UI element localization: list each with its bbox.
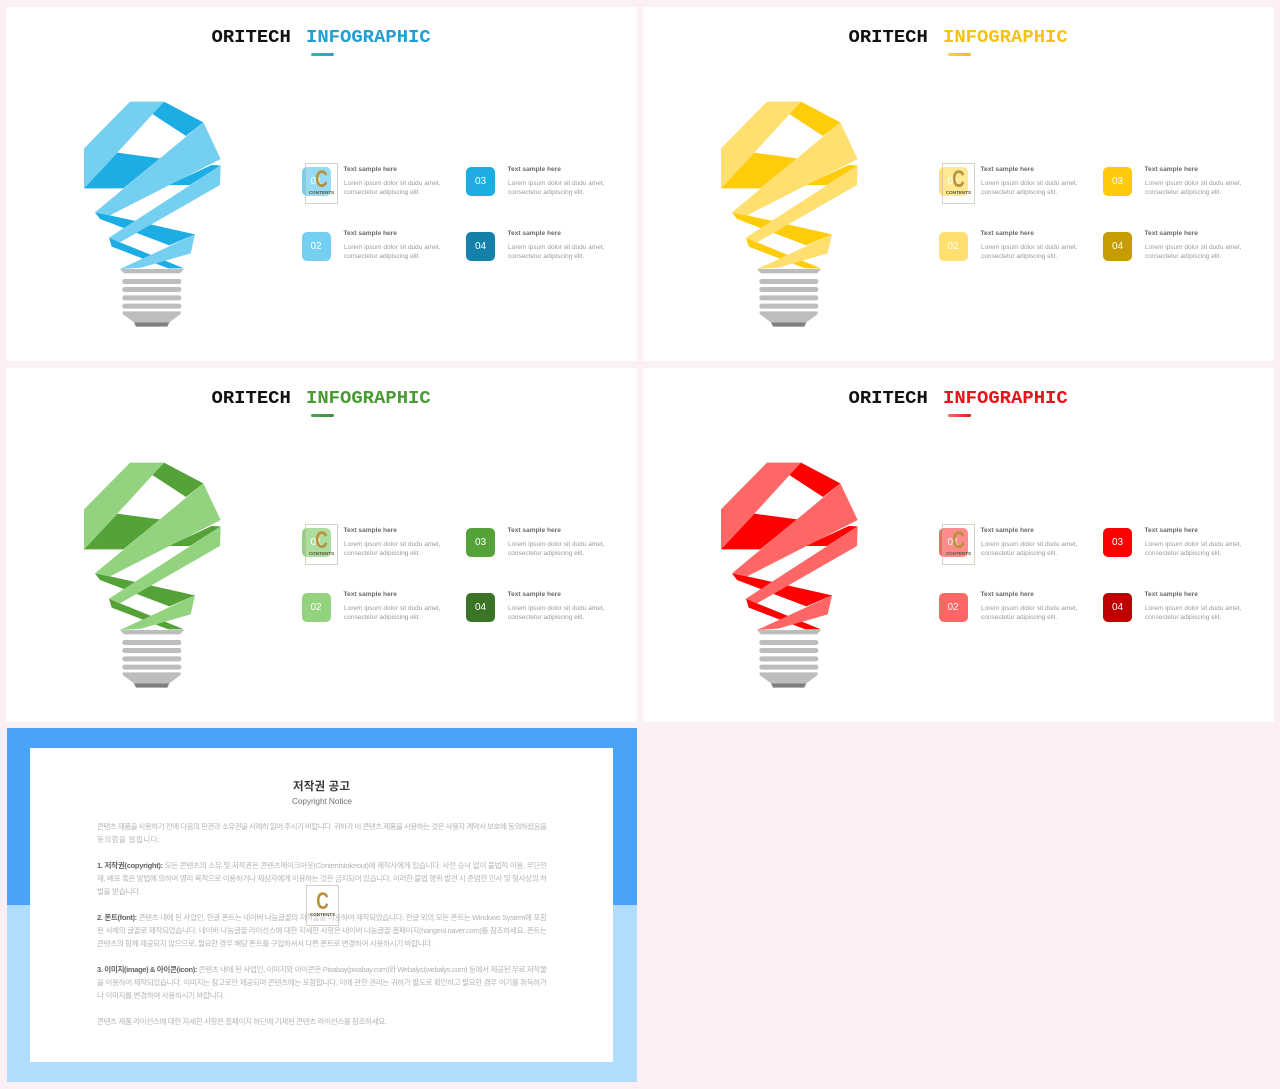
- item 04: Lorem ipsum dolor sit dudu amet,: [1145, 605, 1241, 612]
- panel: yellow infographic: [643, 7, 1274, 361]
- title: [848, 26, 1068, 48]
- item 04: Text sample here: [1144, 591, 1198, 598]
- icon: ribbon light bulb: [84, 102, 221, 327]
- item 01: 01: [310, 176, 322, 187]
- title: INFOGRAPHIC: [306, 26, 431, 48]
- title underline: [948, 414, 970, 417]
- notice body: 된 서체의 글꼴로 제작되었습니다. 네이버 나눔글꼴 라이선스에 대한 자세한 사항은 네이버 나눔글꼴 홈페이지(hangeul.naver.com)를 참조하세요. 폰트는: [97, 925, 547, 935]
- item 02: 02: [310, 240, 322, 252]
- item 03: Text sample here: [1144, 166, 1198, 172]
- watermark badge: [306, 885, 339, 926]
- item 04: consectetur adipiscing elit.: [1145, 614, 1221, 621]
- item 03: consectetur adipiscing elit.: [508, 189, 584, 196]
- item 01: 01: [947, 176, 959, 187]
- item 03: 03: [1112, 537, 1123, 548]
- item 03: Text sample here: [508, 166, 561, 172]
- item 02: Lorem ipsum dolor sit dudu amet,: [344, 244, 440, 251]
- panel: red infographic: [643, 368, 1274, 722]
- item 01: Lorem ipsum dolor sit dudu amet,: [981, 541, 1077, 548]
- item 03: 03: [475, 537, 486, 548]
- watermark badge: CONTENTS: [309, 551, 334, 556]
- notice body: 을 이용하여 제작되었습니다. 이미지는 참고로만 제공되며 콘텐츠에는 포함합니다. 이에 관한 권리는 귀하가 별도로 확인하고 필요한 경우 여기를 취득하거: [97, 977, 547, 987]
- notice text card: [30, 748, 613, 1062]
- item 04: Text sample here: [508, 591, 561, 598]
- item 02: 02: [947, 240, 959, 252]
- item 03: Lorem ipsum dolor sit dudu amet,: [1145, 180, 1241, 187]
- item 04: consectetur adipiscing elit.: [508, 614, 584, 621]
- item 01: consectetur adipiscing elit.: [344, 550, 420, 557]
- icon: ribbon light bulb: [721, 102, 858, 327]
- item 02: Lorem ipsum dolor sit dudu amet,: [981, 605, 1077, 612]
- watermark badge: CONTENTS: [310, 912, 335, 917]
- item 01: Lorem ipsum dolor sit dudu amet,: [344, 180, 440, 187]
- item 03: Text sample here: [508, 526, 561, 534]
- item 02: 02: [310, 602, 322, 612]
- item 04: Lorem ipsum dolor sit dudu amet,: [508, 244, 604, 251]
- item 01: Lorem ipsum dolor sit dudu amet,: [981, 180, 1077, 187]
- panel: blue infographic: [6, 7, 637, 361]
- watermark badge: CONTENTS: [309, 190, 334, 195]
- item 01: consectetur adipiscing elit.: [981, 189, 1057, 196]
- title underline: [310, 414, 334, 417]
- item 02: Lorem ipsum dolor sit dudu amet,: [344, 605, 440, 612]
- notice subheading: Copyright Notice: [292, 796, 352, 806]
- watermark badge: [305, 524, 338, 565]
- watermark badge: C: [315, 527, 328, 554]
- notice body: 콘텐츠 제품 라이선스에 대한 자세한 사항은 홈페이지 하단에 기재된 콘텐츠 라이선스를 참조하세요.: [97, 1016, 387, 1026]
- watermark badge: [305, 163, 338, 204]
- item 02: Text sample here: [344, 591, 397, 598]
- item 04: Text sample here: [1144, 230, 1198, 237]
- item 04: [1103, 230, 1241, 261]
- title: ORITECH: [212, 387, 291, 409]
- item 02: Text sample here: [980, 230, 1034, 237]
- title: ORITECH: [848, 387, 928, 409]
- watermark badge: C: [952, 166, 965, 193]
- item 04: consectetur adipiscing elit.: [508, 253, 584, 260]
- item 03: Lorem ipsum dolor sit dudu amet,: [508, 180, 604, 187]
- title: INFOGRAPHIC: [943, 26, 1068, 48]
- item 03: 03: [1112, 176, 1123, 187]
- item 01: [939, 526, 1077, 557]
- item 01: consectetur adipiscing elit.: [344, 189, 420, 196]
- item 04: 04: [1112, 602, 1123, 612]
- item 03: consectetur adipiscing elit.: [508, 550, 584, 557]
- item 01: Lorem ipsum dolor sit dudu amet,: [344, 541, 440, 548]
- item 02: consectetur adipiscing elit.: [344, 614, 420, 621]
- item 01: Text sample here: [344, 166, 397, 172]
- notice body: 재, 배포 혹은 방법에 의하여 영리 목적으로 이용하거나 제삼자에게 이용하는 것은 금지되어 있습니다. 이러한 불법 행위 발견 시 준엄한 민사 및 형사상의 처: [97, 873, 547, 883]
- item 04: 04: [475, 240, 486, 252]
- panel: copyright notice: [6, 728, 637, 1082]
- watermark badge: CONTENTS: [946, 551, 971, 556]
- title: ORITECH: [848, 26, 928, 48]
- notice body: 2. 폰트(font): 콘텐츠 내에 된 사업인, 한글 폰트는 네이버 나눔글꼴의 저작물을 이용하여 제작되었습니다. 한글 외의 모든 폰트는 Windows System에 포함: [97, 912, 547, 922]
- title: [212, 26, 431, 48]
- item 04: Text sample here: [508, 230, 561, 237]
- item 02: Text sample here: [344, 230, 397, 237]
- item 04: [466, 230, 604, 261]
- item 02: consectetur adipiscing elit.: [981, 253, 1057, 260]
- item 03: Lorem ipsum dolor sit dudu amet,: [508, 541, 604, 548]
- item 02: 02: [947, 602, 959, 612]
- item 02: consectetur adipiscing elit.: [981, 614, 1057, 621]
- watermark badge: C: [316, 888, 329, 915]
- item 04: [466, 591, 604, 622]
- item 04: consectetur adipiscing elit.: [1145, 253, 1221, 260]
- notice body: 콘텐츠의 함께 제공되지 않으므로, 필요한 경우 해당 폰트를 구입하셔서 다른 폰트로 변경하여 사용하시기 바랍니다.: [97, 938, 433, 948]
- notice body: 나 이미지를 변경하여 사용하시기 바랍니다.: [97, 990, 225, 1000]
- item 03: 03: [475, 176, 486, 187]
- title underline: [948, 52, 970, 56]
- watermark badge: [942, 163, 975, 204]
- item 03: consectetur adipiscing elit.: [1145, 550, 1221, 557]
- item 03: Text sample here: [1144, 526, 1198, 534]
- item 03: [1103, 166, 1241, 196]
- item 01: 01: [947, 537, 959, 548]
- item 04: 04: [1112, 240, 1123, 252]
- item 03: [466, 166, 604, 196]
- icon: ribbon light bulb: [84, 462, 221, 688]
- title: ORITECH: [212, 26, 291, 48]
- item 01: Text sample here: [344, 526, 397, 534]
- item 02: [939, 230, 1077, 261]
- title: INFOGRAPHIC: [943, 387, 1068, 409]
- item 03: Lorem ipsum dolor sit dudu amet,: [1145, 541, 1241, 548]
- item 02: Text sample here: [980, 591, 1034, 598]
- watermark badge: [942, 524, 975, 565]
- title: [848, 387, 1068, 409]
- item 01: Text sample here: [980, 526, 1034, 534]
- notice body: [97, 821, 547, 1026]
- title: [212, 387, 431, 409]
- watermark badge: C: [952, 527, 965, 554]
- item 03: consectetur adipiscing elit.: [1145, 189, 1221, 196]
- item 03: [1103, 526, 1241, 557]
- item 01: 01: [310, 537, 322, 548]
- item 04: [1103, 591, 1241, 622]
- notice body: 1. 저작권(copyright): 모든 콘텐츠의 소유 및 저작권은 콘텐츠메이크아웃(Contentstokeout)에 제작사에게 있습니다. 사전 승낙 없이 불법적 이용, 무단전: [97, 860, 547, 870]
- item 02: [939, 591, 1077, 622]
- item 03: [466, 526, 604, 557]
- item 01: [302, 166, 440, 196]
- item 02: [302, 230, 440, 261]
- item 04: 04: [475, 602, 486, 612]
- item 02: consectetur adipiscing elit.: [344, 253, 420, 260]
- item 01: [939, 166, 1077, 196]
- item 01: [302, 526, 440, 557]
- notice body: 벌을 받습니다.: [97, 886, 141, 896]
- notice body: 동의함을 알립니다.: [97, 834, 160, 844]
- title underline: [310, 52, 334, 56]
- item 04: Lorem ipsum dolor sit dudu amet,: [508, 605, 604, 612]
- item 02: Lorem ipsum dolor sit dudu amet,: [981, 244, 1077, 251]
- notice body: 콘텐츠 제품을 사용하기 전에 다음의 판권과 소유권을 사례히 읽어 주시기 바랍니다. 귀하가 이 콘텐츠 제품을 사용하는 것은 사용자 계약서 보호에 동의하셨음을: [97, 821, 547, 831]
- notice heading: 저작권 공고: [293, 779, 350, 793]
- watermark badge: C: [315, 166, 328, 193]
- item 01: consectetur adipiscing elit.: [981, 550, 1057, 557]
- item 04: Lorem ipsum dolor sit dudu amet,: [1145, 244, 1241, 251]
- item 01: Text sample here: [980, 166, 1034, 172]
- item 02: [302, 591, 440, 622]
- notice body: 3. 이미지(image) & 아이콘(icon): 콘텐츠 내에 된 사업인, 이미지와 아이콘은 Pixabay(pixabay.com)와 Webalys(webalys.com) 등에서 제공된 무료 저작물: [97, 964, 547, 974]
- panel: green infographic: [6, 368, 637, 722]
- title: INFOGRAPHIC: [306, 387, 431, 409]
- icon: ribbon light bulb: [721, 462, 858, 688]
- watermark badge: CONTENTS: [946, 190, 971, 195]
